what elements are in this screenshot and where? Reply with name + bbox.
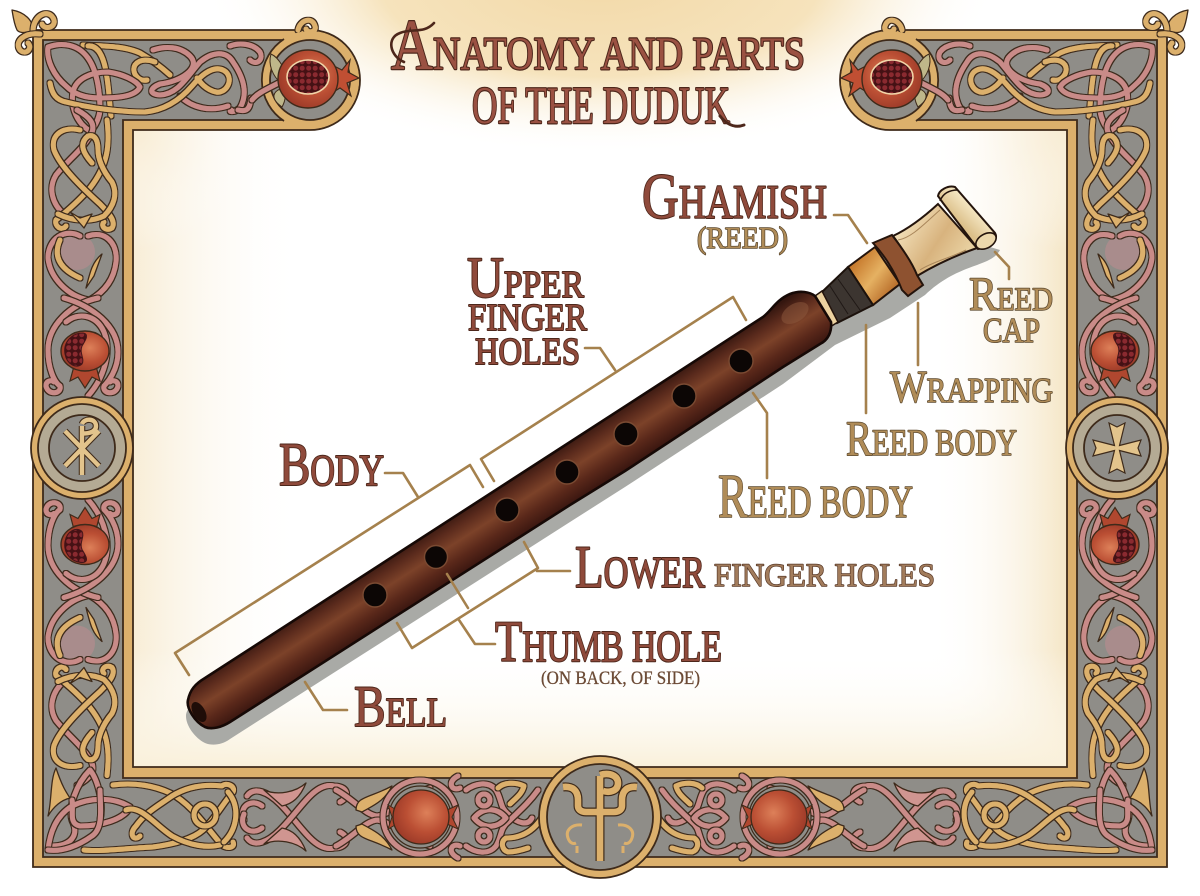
bell opening — [188, 699, 210, 725]
head highlight — [778, 297, 812, 329]
label: upper finger holes: UPPER — [467, 245, 585, 310]
reed cap — [938, 187, 999, 253]
pomegranate strands — [46, 298, 118, 396]
gold frame band — [33, 30, 600, 867]
bracket: body — [175, 465, 483, 675]
bottom scroll beside medallion — [466, 783, 550, 852]
label: thumb hole: (ON BACK, OF SIDE) — [541, 668, 700, 689]
reed blade — [893, 204, 977, 276]
frame: left half — [12, 10, 600, 867]
label: thumb hole — [495, 609, 722, 689]
corner flourish — [12, 10, 315, 52]
right medallion — [1066, 397, 1168, 499]
label: ghamish — [642, 161, 827, 255]
heart — [48, 233, 116, 300]
bottom medallion — [539, 756, 661, 878]
top row interlace — [48, 44, 261, 131]
wooden body — [188, 292, 831, 728]
grey frame field — [43, 40, 600, 857]
leader: bell — [305, 682, 347, 710]
label: reed body upper: REED BODY — [846, 410, 1017, 466]
label: lower finger holes: LOWER — [575, 534, 706, 600]
label: upper finger holes: HOLES — [475, 331, 580, 373]
title parchment glow — [180, 0, 1020, 160]
duduk shadow — [186, 244, 1000, 745]
bracket: lower finger holes — [397, 542, 570, 648]
label: reed cap: CAP — [983, 311, 1040, 350]
label: body: BODY — [279, 432, 384, 499]
pomegranate — [61, 331, 109, 388]
bottom row interlace — [48, 768, 460, 858]
leader: wrapping — [917, 303, 919, 365]
cream ring — [815, 291, 838, 327]
left medallion — [31, 397, 133, 499]
bottom row pomegranate — [383, 780, 458, 854]
bracket: upper finger holes — [481, 297, 746, 481]
duduk instrument — [188, 187, 999, 728]
label: reed cap — [969, 268, 1053, 350]
brown reed binding — [873, 235, 923, 296]
label: upper finger holes: FINGER — [468, 297, 588, 339]
label: lower finger holes: FINGER HOLES — [714, 558, 935, 594]
label: ghamish: (REED) — [697, 220, 788, 255]
label: upper finger holes — [467, 245, 588, 373]
leader: thumb hole — [447, 574, 495, 644]
label: bell: BELL — [354, 674, 447, 739]
leader: ghamish — [834, 215, 867, 243]
pomegranate with stem — [252, 50, 359, 108]
leader: upper reed body — [865, 325, 867, 413]
finger holes — [363, 349, 753, 607]
label: wrapping: WRAPPING — [890, 361, 1053, 412]
label: reed body lower: REED BODY — [718, 463, 913, 531]
knot — [52, 110, 115, 229]
title — [391, 5, 805, 135]
column interlace lower copy — [46, 500, 118, 786]
trident cross symbol — [563, 774, 637, 861]
title: ANATOMY AND PARTS — [391, 5, 805, 85]
column interlace, upper and lower — [46, 110, 118, 396]
top roundel — [252, 31, 359, 129]
frame: right half — [600, 10, 1188, 867]
orange reed section — [848, 247, 900, 305]
black thread wrap — [822, 267, 873, 323]
leader: reed cap — [995, 252, 1009, 279]
leader: lower reed body — [753, 393, 767, 478]
title: OF THE DUDUK — [472, 77, 730, 135]
label: reed cap: REED — [969, 268, 1053, 321]
label: thumb hole: THUMB HOLE — [495, 609, 722, 674]
label: lower finger holes — [575, 534, 935, 600]
label: ghamish: GHAMISH — [642, 161, 827, 233]
chi rho symbol — [65, 420, 99, 475]
cross symbol — [1093, 423, 1141, 473]
